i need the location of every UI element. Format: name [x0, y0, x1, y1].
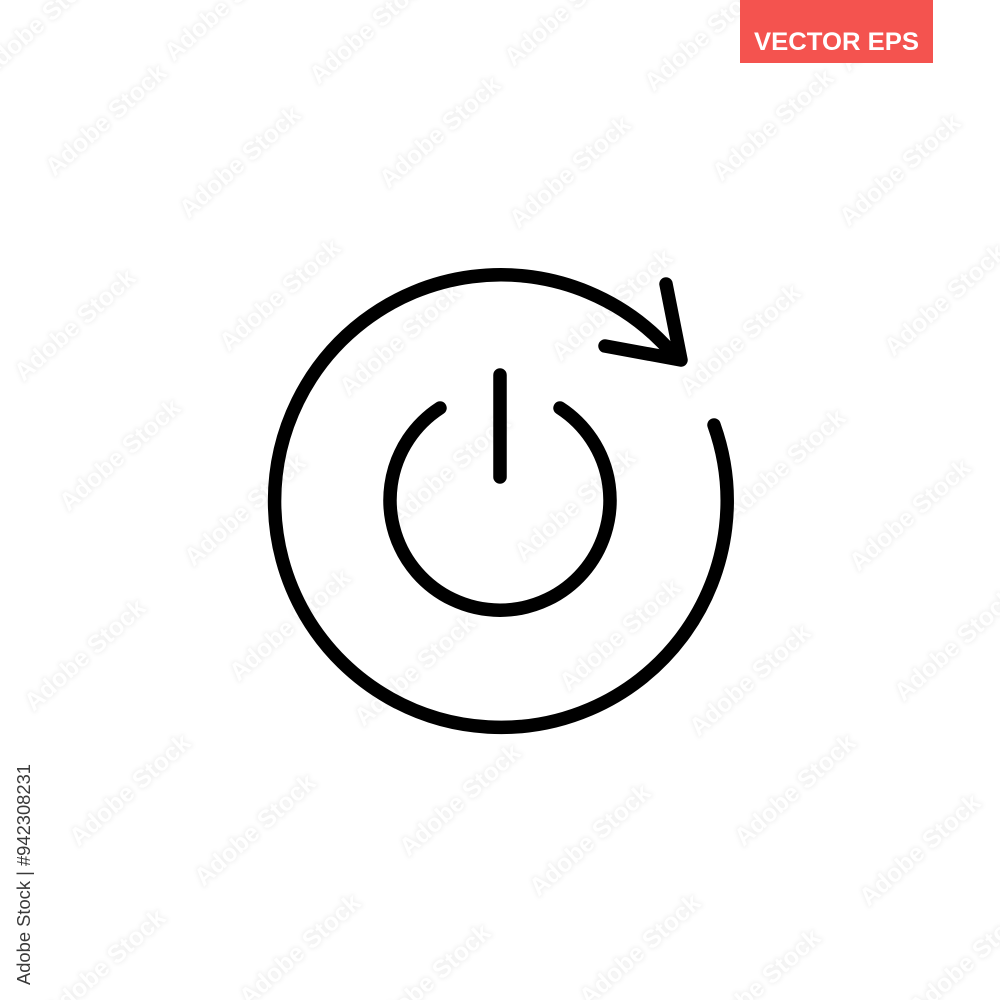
- watermark pattern: Adobe Stock: [844, 453, 976, 577]
- watermark pattern: Adobe Stock: [224, 563, 356, 687]
- arrowhead: [605, 284, 681, 360]
- watermark pattern: Adobe Stock: [546, 243, 678, 367]
- watermark pattern: Adobe Stock: [707, 63, 839, 187]
- watermark pattern: Adobe Stock: [684, 618, 816, 742]
- watermark pattern: Adobe Stock: [64, 728, 196, 852]
- power symbol ring: [390, 408, 610, 610]
- watermark pattern: Adobe Stock: [189, 768, 321, 892]
- watermark pattern: Adobe Stock: [334, 278, 466, 402]
- circular arrow arc: [275, 275, 727, 727]
- watermark pattern: Adobe Stock: [9, 263, 141, 387]
- watermark pattern: Adobe Stock: [374, 70, 506, 194]
- stock id caption: Adobe Stock | #942308231: [14, 764, 34, 985]
- badge: vector eps: [740, 0, 933, 63]
- badge: vector eps: VECTOR EPS: [754, 28, 919, 56]
- watermark pattern: Adobe Stock: [19, 593, 151, 717]
- watermark pattern: Adobe Stock: [524, 778, 656, 902]
- power symbol bar: [493, 375, 507, 477]
- watermark pattern: Adobe Stock: [854, 788, 986, 912]
- watermark pattern: Adobe Stock: [349, 608, 481, 732]
- watermark pattern: Adobe Stock: [214, 233, 346, 357]
- watermark pattern: Adobe Stock: [54, 393, 186, 517]
- watermark pattern: Adobe Stock: [509, 443, 641, 567]
- watermark pattern: Adobe Stock: [674, 278, 806, 402]
- watermark pattern: Adobe Stock: [179, 448, 311, 572]
- watermark pattern: Adobe Stock: [729, 728, 861, 852]
- watermark pattern: Adobe Stock: [40, 58, 172, 182]
- watermark pattern: Adobe Stock: [394, 738, 526, 862]
- watermark pattern: Adobe Stock: [719, 403, 851, 527]
- watermark pattern: Adobe Stock: [834, 108, 966, 232]
- icon: power restart: [275, 275, 727, 727]
- watermark pattern: Adobe Stock: [174, 100, 306, 224]
- watermark pattern: Adobe Stock: [384, 408, 516, 532]
- watermark pattern: Adobe Stock: [504, 110, 636, 234]
- watermark pattern: Adobe Stock: [554, 573, 686, 697]
